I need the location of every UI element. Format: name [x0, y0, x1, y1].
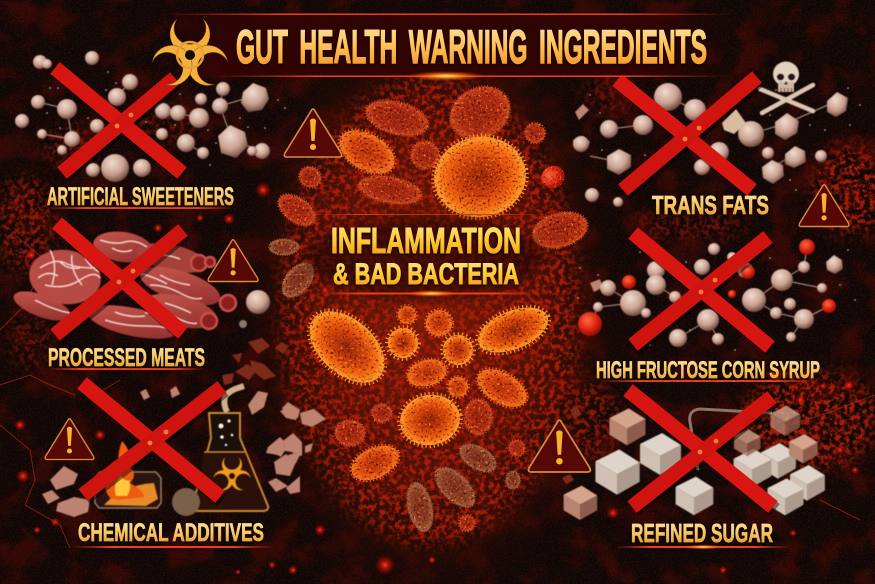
title banner [149, 14, 735, 90]
rock flakes [222, 104, 603, 484]
panel: trans fats [573, 62, 860, 220]
meat slices [10, 228, 270, 345]
flask with biohazard [172, 386, 268, 516]
panel: artificial sweeteners [15, 51, 285, 211]
red X [633, 233, 772, 350]
metal clip [690, 409, 772, 470]
label: TRANS FATS [652, 190, 769, 220]
warning triangle: processed meats [208, 240, 258, 282]
warning triangle: trans fats [799, 185, 849, 226]
panel: high fructose corn syrup [578, 233, 855, 384]
central heading: inflammation and bad bacteria: INFLAMMATION [331, 220, 521, 261]
icon: biohazard symbol [149, 19, 231, 90]
red X [628, 390, 775, 510]
red X [55, 223, 185, 338]
label: REFINED SUGAR [631, 518, 773, 548]
panel: processed meats [10, 223, 270, 372]
panel: refined sugar [564, 390, 825, 550]
pink rocks [42, 386, 302, 517]
label [615, 518, 790, 550]
molecule cluster [15, 51, 285, 182]
label: ARTIFICIAL SWEETENERS [47, 183, 234, 211]
warning triangle: chemical additives [45, 419, 94, 460]
central bacteria cluster [269, 76, 591, 534]
label: CHEMICAL ADDITIVES [78, 519, 264, 547]
red X [82, 383, 224, 500]
red X [617, 77, 759, 193]
panel: chemical additives [42, 383, 302, 548]
red X [55, 68, 184, 176]
flame and tray [95, 441, 161, 508]
central heading: inflammation and bad bacteria [307, 214, 543, 300]
warning triangle: top centre [284, 109, 342, 157]
icon: skull and crossbones [760, 62, 813, 113]
central heading: inflammation and bad bacteria: & BAD BACTERIA [333, 258, 519, 291]
molecule cluster [578, 239, 855, 350]
sugar cubes [564, 406, 825, 520]
label: PROCESSED MEATS [48, 344, 205, 372]
molecule cluster [573, 83, 860, 207]
warning triangle: refined sugar [528, 420, 590, 472]
